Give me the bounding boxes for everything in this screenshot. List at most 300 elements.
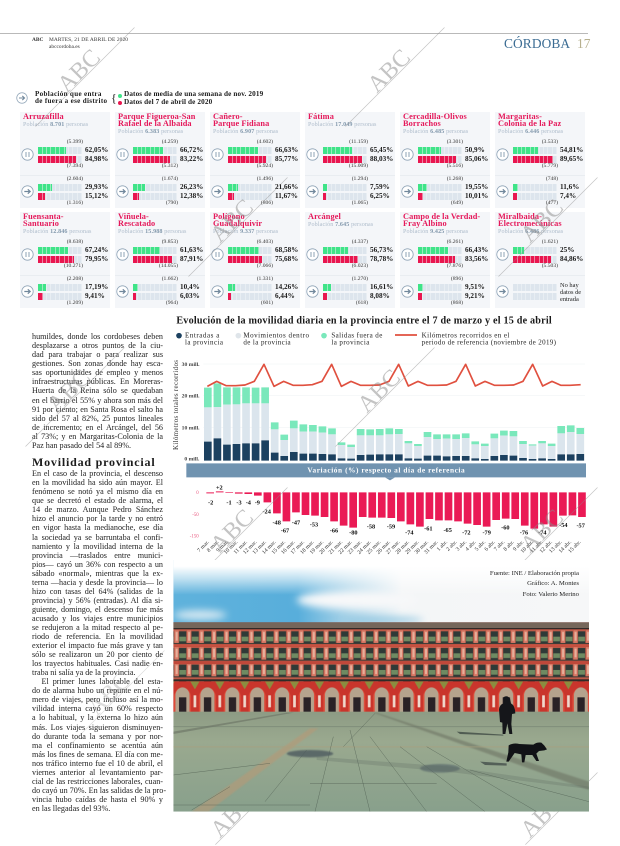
date axis labels: 24 mar. (357, 539, 373, 556)
incoming population bars: 17,19% (85, 283, 108, 291)
value labels: -76 (520, 530, 528, 537)
internal mobility bars: (14.055) (159, 263, 178, 269)
district title: Campo de la Verdad- (403, 212, 480, 220)
internal mobility bars: 85,77% (275, 155, 298, 163)
legend: movimientos (236, 332, 310, 347)
article text: Movilidad provincial: nos tráfico interno fue el 10 de abril, el (32, 759, 163, 768)
date axis labels: 7 mar. (197, 539, 211, 554)
value labels: -47 (292, 520, 301, 527)
article text: Movilidad provincial: acusado y los viajes entre municipios (32, 614, 163, 623)
internal mobility bars: 50,9% (465, 146, 485, 154)
watermarks: ABC (516, 790, 569, 843)
incoming population bars (305, 275, 395, 308)
y axis labels: 20 mill. (182, 394, 200, 400)
date axis labels: 8 mar. (206, 539, 221, 554)
district title: Fray Albino (403, 219, 447, 228)
internal mobility bars: (5.503) (542, 263, 558, 269)
incoming population bars: 11,6% (560, 183, 579, 191)
internal mobility bars: 66,63% (275, 146, 298, 154)
incoming population bars (115, 275, 205, 308)
internal mobility bars: 79,95% (85, 255, 108, 263)
incoming population bars: (649) (451, 200, 463, 206)
population: Población 9.425 personas (403, 229, 468, 235)
internal mobility bars: (5.399) (67, 139, 83, 145)
header rule and date line: MARTES, 21 DE ABRIL DE 2020 (49, 37, 128, 43)
incoming population bars: 26,23% (180, 183, 203, 191)
article text: Movilidad provincial: traba ni salía ya de la provincia. (32, 668, 136, 677)
chart: daily variation against reference (165, 460, 590, 565)
panel: Margaritas-Colonia de la Paz (495, 112, 585, 208)
panel: Arruzafilla (20, 112, 110, 208)
district title: Electromecánicas (498, 219, 562, 228)
incoming population bars: (601) (261, 300, 273, 306)
watermarks: ABC (516, 195, 569, 248)
internal mobility bars (401, 239, 488, 269)
district title: Guadalquivir (213, 219, 262, 228)
incoming population bars: 6,03% (180, 292, 200, 300)
incoming population bars: (477) (546, 200, 558, 206)
internal mobility bars (401, 139, 488, 169)
value labels: -54 (559, 522, 568, 529)
article text: Movilidad provincial: viernes anterior al levantamiento par- (32, 768, 163, 777)
panel: Miralbaida-Electromecánicas (495, 212, 585, 308)
value labels: -58 (367, 523, 375, 530)
internal mobility bars: (3.533) (542, 139, 558, 145)
population: Población 15.988 personas (118, 229, 187, 235)
internal mobility bars: 66,72% (180, 146, 203, 154)
reference line (207, 364, 581, 386)
district title: Cercadilla-Olivos (403, 112, 467, 120)
legend: movimientos: Movimientos dentro (243, 332, 310, 340)
watermarks: ABC (206, 195, 259, 248)
incoming population bars: (1.294) (352, 176, 368, 182)
incoming population bars: 10,4% (180, 283, 200, 291)
population: Población 6.446 personas (498, 129, 563, 135)
date axis labels: 3 abr. (455, 539, 469, 553)
internal mobility bars: 84,98% (85, 155, 108, 163)
article text: Movilidad provincial: sólo se realizaron un 20 por ciento de (32, 650, 163, 659)
date axis labels: 17 mar. (290, 539, 306, 556)
date axis labels: 13 abr. (548, 539, 564, 555)
internal mobility bars: 61,63% (180, 246, 203, 254)
watermarks: ABC (206, 790, 259, 843)
date axis labels: 5 abr. (474, 539, 488, 553)
incoming population bars (115, 175, 205, 208)
section name and page number: 17 (577, 36, 590, 51)
article text: Movilidad provincial: en vigor hasta la medianoche, ese día (32, 523, 163, 532)
population: Población 12.846 personas (23, 229, 92, 235)
incoming population bars: (1.209) (67, 300, 83, 306)
article text: Movilidad provincial: provincia —traslados entre munici- (32, 551, 163, 560)
value labels: -67 (281, 528, 290, 535)
value labels: +2 (216, 485, 223, 492)
sky (173, 560, 589, 623)
header rule and date line: abccordoba.es (49, 44, 80, 50)
internal mobility bars (496, 239, 583, 269)
article text: first column fragment: sido del 57 al 82%, 25 puntos lineales (32, 414, 163, 423)
watermarks: ABC (516, 505, 569, 558)
date axis labels: 12 abr. (539, 539, 554, 555)
header rule and date line: ABC (32, 37, 43, 43)
panel: Fuensanta-Santuario (20, 212, 110, 308)
internal mobility bars: 67,24% (85, 246, 108, 254)
article text: Movilidad provincial: hizo el anuncio por la tarde y no entró (32, 514, 163, 523)
legend: population entering (35, 90, 107, 105)
date axis labels: 19 mar. (309, 539, 326, 556)
article text: Movilidad provincial: terna —hacia y desde la provincia— lo (32, 578, 163, 587)
internal mobility bars: (7.066) (257, 263, 273, 269)
value labels: -80 (349, 530, 358, 537)
incoming population bars: 19,55% (465, 183, 488, 191)
district title: Rafael de la Albaida (118, 119, 192, 128)
article text: Movilidad provincial: se redujeron a la mitad respecto al pe- (32, 623, 163, 632)
incoming population bars: (806) (261, 200, 273, 206)
legend: salidas: Salidas fuera de (331, 332, 382, 340)
district title: Colonia de la Paz (498, 119, 561, 128)
incoming population bars: 14,26% (275, 283, 298, 291)
value labels: -48 (272, 520, 281, 527)
date axis labels: 27 mar. (385, 539, 402, 556)
value labels: -61 (424, 525, 433, 532)
internal mobility bars: 83,56% (465, 255, 488, 263)
district title (498, 112, 561, 128)
incoming population bars: 15,12% (85, 192, 108, 200)
watermarks: ABC (43, 365, 96, 418)
population: Población 6.485 personas (403, 129, 468, 135)
internal mobility bars: (6.023) (352, 263, 368, 269)
incoming population bars: (1.270) (352, 276, 368, 282)
date axis labels: 1 abr. (436, 539, 449, 553)
value labels: -57 (576, 523, 586, 530)
date axis labels: 22 mar. (338, 539, 354, 556)
internal mobility bars: (6.403) (257, 239, 273, 245)
district title: Arcángel (308, 212, 341, 220)
internal mobility bars: (9.853) (162, 239, 178, 245)
date axis labels: 31 mar. (423, 539, 440, 556)
incoming population bars: 11,67% (275, 192, 298, 200)
article text: first column fragment: de incremento; en el Arcángel, del 56 (32, 423, 163, 432)
population: Población 8.701 personas (23, 122, 88, 128)
incoming population bars (20, 175, 110, 208)
district title: Parque Figueroa-San (118, 112, 195, 120)
y axis labels: 30 mill. (182, 362, 200, 368)
bars: salidas fuera (204, 383, 584, 447)
article text: Movilidad provincial: pios— cayó un 36% con respecto a un (32, 560, 163, 569)
article text: first column fragment: humildes, donde los cordobeses deben (32, 332, 163, 341)
bars: movimientos dentro (204, 403, 584, 459)
article text: Movilidad provincial: vincia hubo caídas de hasta el 90% y (32, 795, 163, 804)
district title: Santuario (23, 219, 59, 228)
incoming population: no data (495, 275, 585, 308)
article text: first column fragment: en el barrio el 55% y ahora son más del (32, 396, 163, 405)
date axis labels: 7 abr. (493, 539, 507, 553)
population: Población 9.337 personas (213, 229, 278, 235)
incoming population bars: 8,08% (370, 292, 390, 300)
y axis labels: -150 (190, 535, 199, 540)
article text: first column fragment: infraestructuras públicas. En Moreras- (32, 377, 163, 386)
article text: first column fragment: gestiones. Son zonas donde hay esca- (32, 359, 163, 368)
date axis labels: 23 mar. (347, 539, 364, 556)
district title (118, 112, 196, 128)
article text: Movilidad provincial (32, 469, 166, 813)
internal mobility bars: 89,65% (560, 155, 583, 163)
internal mobility bars: 83,22% (180, 155, 203, 163)
value labels: -60 (501, 524, 510, 531)
date axis labels: 10 abr. (520, 539, 535, 555)
incoming population bars (400, 275, 490, 308)
internal mobility bars (211, 139, 298, 169)
panel: Arcángel (305, 212, 395, 308)
district title: Margaritas- (498, 112, 542, 120)
internal mobility bars: (3.301) (447, 139, 463, 145)
population: Población 7.645 personas (308, 222, 373, 228)
date axis labels: 18 mar. (299, 539, 316, 556)
y axis labels: 0 mill. (184, 457, 200, 463)
district title: Viñuela- (118, 212, 149, 220)
date axis labels: 12 mar. (242, 539, 259, 556)
article text: Movilidad provincial: do de alarma hubo un repunte en el nú- (32, 686, 163, 695)
article text: Movilidad provincial: ma el confinamiento se acentúa aún (32, 741, 163, 750)
legend: salidas (321, 332, 382, 347)
y axis labels (182, 362, 200, 463)
legend: data colours: Datos del 7 de abril de 2020 (124, 98, 212, 106)
population: Población 6.383 personas (118, 129, 183, 135)
incoming population bars: 9,41% (85, 292, 105, 300)
incoming population bars (400, 175, 490, 208)
value labels: -9 (255, 499, 260, 506)
bars: entradas (204, 438, 584, 461)
man (457, 696, 515, 736)
article text: Movilidad provincial: más. Los viajes siguieron disminuyen- (32, 722, 163, 732)
incoming population: no data: entrada (560, 296, 579, 303)
internal mobility bars: (4.602) (257, 139, 273, 145)
incoming population bars: (896) (451, 276, 463, 282)
legend: data colours: Datos de media de una semana de nov. 2019 (124, 90, 263, 98)
icon: entering population arrow (16, 92, 28, 104)
population: Población 17.049 personas (308, 122, 377, 128)
incoming population bars: (964) (166, 300, 178, 306)
internal mobility bars: (10.271) (64, 263, 83, 269)
article text: Movilidad provincial: en la movilidad ha sido aún mayor. El (32, 478, 163, 487)
article text: first column fragment: sas oportunidades de empleo y menos (32, 368, 163, 377)
internal mobility bars: (15.009) (349, 163, 368, 169)
internal mobility bars (116, 239, 203, 269)
value labels: -2 (208, 499, 213, 506)
y axis labels: 0 (196, 491, 199, 496)
legend: entradas (176, 332, 224, 347)
internal mobility bars (21, 239, 108, 269)
date axis labels: 8 abr. (503, 539, 516, 553)
date axis labels: 11 abr. (529, 539, 545, 554)
article text: Movilidad provincial: a lo habitual, y la externa lo hizo aún (32, 713, 163, 722)
district title (118, 212, 155, 228)
legend: data colours (118, 90, 263, 106)
district title (403, 212, 480, 228)
article text: Movilidad provincial: provincia) y 56% (entradas). Al día si- (32, 596, 163, 605)
plaza pavement (173, 712, 589, 812)
internal mobility bars: 56,73% (370, 246, 393, 254)
incoming population bars: (1.065) (352, 200, 368, 206)
source credits: Foto: Valerio Merino (523, 591, 579, 598)
panel: Cercadilla-Olivos Borrachos (400, 112, 490, 208)
incoming population bars: 6,44% (275, 292, 295, 300)
internal mobility bars: 87,91% (180, 255, 203, 263)
incoming population bars: 9,21% (465, 292, 485, 300)
district title (213, 212, 262, 228)
internal mobility bars: 65,45% (370, 146, 393, 154)
internal mobility bars: (5.516) (447, 163, 463, 169)
article text: Movilidad provincial: mero de viajes, pero incluso así la mo- (32, 695, 163, 704)
incoming population bars: 29,93% (85, 183, 108, 191)
internal mobility bars: 66,43% (465, 246, 488, 254)
article text: first column fragment: al 73%; y en Margaritas-Colonia de la (32, 432, 163, 441)
value labels: -1 (226, 499, 232, 506)
value labels: -79 (482, 530, 491, 537)
source credits: Fuente: INE / Elaboración propia (490, 570, 579, 577)
district title: Fuensanta- (23, 212, 64, 220)
date axis labels: 15 mar. (271, 539, 287, 556)
incoming population bars: (868) (451, 300, 463, 306)
date axis labels: 16 mar. (280, 539, 297, 556)
district title: Parque Fidiana (213, 119, 269, 128)
date axis labels (197, 539, 583, 556)
value labels: -72 (462, 530, 471, 537)
internal mobility bars: 84,86% (560, 255, 583, 263)
value labels: -24 (262, 508, 272, 515)
internal mobility bars: (11.159) (349, 139, 368, 145)
watermarks: ABC (206, 505, 259, 558)
population: Población 6.907 personas (213, 129, 278, 135)
article text: Movilidad provincial: hizo con tasas del 64% (salidas de la (32, 587, 163, 596)
incoming population bars: 9,51% (465, 283, 485, 291)
district title: Rescatado (118, 219, 155, 228)
date axis labels: 2 abr. (445, 539, 459, 553)
article text: Movilidad provincial: vilidad interna cayó un 60% respecto (32, 704, 163, 713)
date axis labels: 4 abr. (465, 539, 478, 553)
panel: Polígono Guadalquivir (210, 212, 300, 308)
date axis labels: 14 mar. (261, 539, 278, 556)
building facade (173, 622, 589, 712)
incoming population bars (210, 175, 300, 208)
article text: Movilidad provincial: sábado «normal», mientras que la ex- (32, 569, 163, 578)
date axis labels: 11 mar. (233, 539, 249, 556)
legend brace: { (111, 91, 117, 105)
internal mobility bars: 85,06% (465, 155, 488, 163)
source credits (470, 569, 579, 600)
article text: Movilidad provincial: En el caso de la provincia, el descenso (32, 469, 163, 478)
photo: Plaza de la Corredera (173, 560, 589, 812)
incoming population bars (210, 275, 300, 308)
district title: Polígono (213, 212, 245, 220)
value labels (208, 485, 586, 537)
incoming population bars: 21,66% (275, 183, 298, 191)
article text: first column fragment: Paz han pasado del 54 al 89%. (32, 441, 131, 450)
header rule and date line (0, 33, 588, 49)
value labels: -74 (405, 530, 414, 537)
date axis labels: 20 mar. (318, 539, 335, 556)
panel: Parque Figueroa (115, 112, 205, 208)
source credits: Gráfico: A. Montes (527, 580, 579, 587)
article text: Movilidad provincial: los trayectos habituales. Casi nadie en- (32, 659, 163, 668)
date axis labels: 10 mar. (223, 539, 240, 556)
date axis labels: 25 mar. (366, 539, 383, 556)
article text: first column fragment: Huerta de la Reina sólo se quedaban (32, 386, 163, 395)
internal mobility bars (306, 239, 393, 269)
legend: reference line: Kilómetros recorridos en el (422, 332, 509, 340)
article text: Movilidad provincial: 14 de marzo. Aunque Pedro Sánchez (32, 505, 163, 514)
banner (186, 463, 586, 480)
chart title: Evolución de la movilidad diaria en la provincia entre el 7 de marzo y el 15 de abril (176, 316, 552, 327)
incoming population bars: (790) (166, 200, 178, 206)
date axis labels: 9 abr. (512, 539, 526, 553)
value labels: -53 (310, 522, 318, 529)
article text: first column fragment: desplazarse a otros puntos de la ciu- (32, 341, 163, 350)
legend: population entering: Población que entra (35, 90, 102, 98)
value labels: -66 (330, 528, 338, 535)
incoming population bars (495, 175, 585, 208)
subheading: Movilidad provincial: Movilidad provincial (32, 454, 155, 468)
panel: Viñuela-Rescatado (115, 212, 205, 308)
internal mobility bars: 62,05% (85, 146, 108, 154)
internal mobility bars: (4.337) (352, 239, 368, 245)
value labels: -74 (538, 530, 547, 537)
internal mobility bars (306, 139, 393, 169)
incoming population bars: (748) (546, 176, 558, 182)
incoming population bars (305, 175, 395, 208)
article text: Movilidad provincial: fenómeno se notó ya el mismo día en (32, 487, 163, 496)
date axis labels: 26 mar. (376, 539, 392, 556)
internal mobility bars (211, 239, 298, 269)
panel: Fátima (305, 112, 395, 208)
internal mobility bars: 54,81% (560, 146, 583, 154)
incoming population bars: 16,61% (370, 283, 393, 291)
section name and page number: CÓRDOBA (504, 36, 570, 51)
article text: Movilidad provincial: la sociedad ya se barruntaba el confi- (32, 533, 163, 542)
internal mobility bars: 68,58% (275, 246, 298, 254)
incoming population bars: 7,4% (560, 192, 576, 200)
date axis labels: 30 mar. (414, 539, 430, 556)
internal mobility bars (116, 139, 203, 169)
internal mobility bars (496, 139, 583, 169)
internal mobility bars: (7.876) (447, 263, 463, 269)
red variation bars (206, 491, 586, 529)
date axis labels: 15 abr. (567, 539, 583, 555)
date axis labels: 9 mar. (216, 539, 230, 554)
incoming population bars (20, 275, 110, 308)
panel: Campo de la Verdad-Fray Albino (400, 212, 490, 308)
district title (403, 112, 467, 128)
article text: Movilidad provincial: en las llegadas del 93%. (32, 804, 110, 813)
incoming population bars: (1.316) (67, 200, 83, 206)
legend: movimientos: de la provincia (243, 339, 292, 347)
article text: Movilidad provincial: do cayó un 70%. En las salidas de la pro- (32, 786, 166, 795)
incoming population bars: 10,01% (465, 192, 488, 200)
incoming population: no data: No hay (560, 282, 579, 289)
watermarks: ABC (53, 45, 106, 98)
incoming population bars: (618) (356, 300, 368, 306)
article text: Movilidad provincial: exterior el impacto fue más grave y tan (32, 641, 163, 650)
district title (23, 212, 64, 228)
date axis labels: 21 mar. (328, 539, 345, 556)
internal mobility bars: (5.312) (162, 163, 178, 169)
district title: Miralbaida- (498, 212, 542, 220)
chart: daily mobility stacked bars and reference line (172, 316, 585, 463)
district title (498, 212, 562, 228)
legend: entradas: la provincia (185, 339, 224, 347)
watermarks: ABC (83, 668, 136, 721)
date axis labels: 14 abr. (558, 539, 573, 555)
population: Población 6.486 personas (498, 229, 563, 235)
